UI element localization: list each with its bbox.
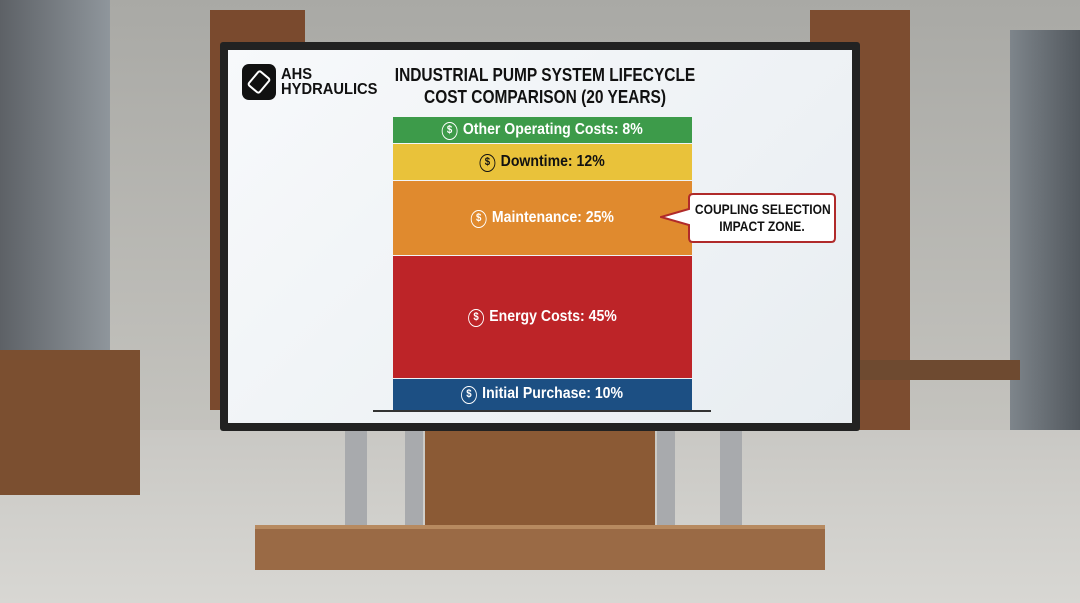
segment: other operating: $ bbox=[447, 124, 453, 136]
segment: other operating bbox=[393, 117, 692, 143]
callout: IMPACT ZONE. bbox=[719, 218, 805, 234]
segment: maintenance: $ bbox=[476, 212, 482, 224]
title: INDUSTRIAL PUMP SYSTEM LIFECYCLE bbox=[395, 65, 695, 85]
logo: HYDRAULICS bbox=[281, 81, 377, 98]
callout: COUPLING SELECTION bbox=[695, 201, 831, 217]
icon: logo badge bbox=[242, 64, 276, 100]
segment: maintenance bbox=[393, 181, 692, 255]
segment: other operating: Other Operating Costs: 8% bbox=[463, 120, 643, 138]
logo: AHS bbox=[281, 66, 312, 83]
segment: downtime: $ bbox=[485, 156, 491, 168]
segment: downtime: Downtime: 12% bbox=[501, 152, 605, 170]
segment: maintenance: Maintenance: 25% bbox=[492, 208, 614, 226]
segment: energy: Energy Costs: 45% bbox=[489, 308, 617, 324]
title bbox=[395, 65, 695, 107]
segment: energy bbox=[393, 256, 692, 378]
screen bbox=[220, 42, 860, 431]
segment: downtime bbox=[393, 144, 692, 180]
logo bbox=[242, 64, 377, 100]
segment: initial purchase: $ bbox=[467, 388, 472, 400]
callout bbox=[660, 193, 836, 243]
segment: initial purchase bbox=[393, 379, 692, 410]
segment: energy: $ bbox=[473, 310, 479, 322]
stacked bar chart bbox=[373, 117, 711, 412]
segment: initial purchase: Initial Purchase: 10% bbox=[483, 385, 623, 402]
title: COST COMPARISON (20 YEARS) bbox=[424, 87, 666, 107]
